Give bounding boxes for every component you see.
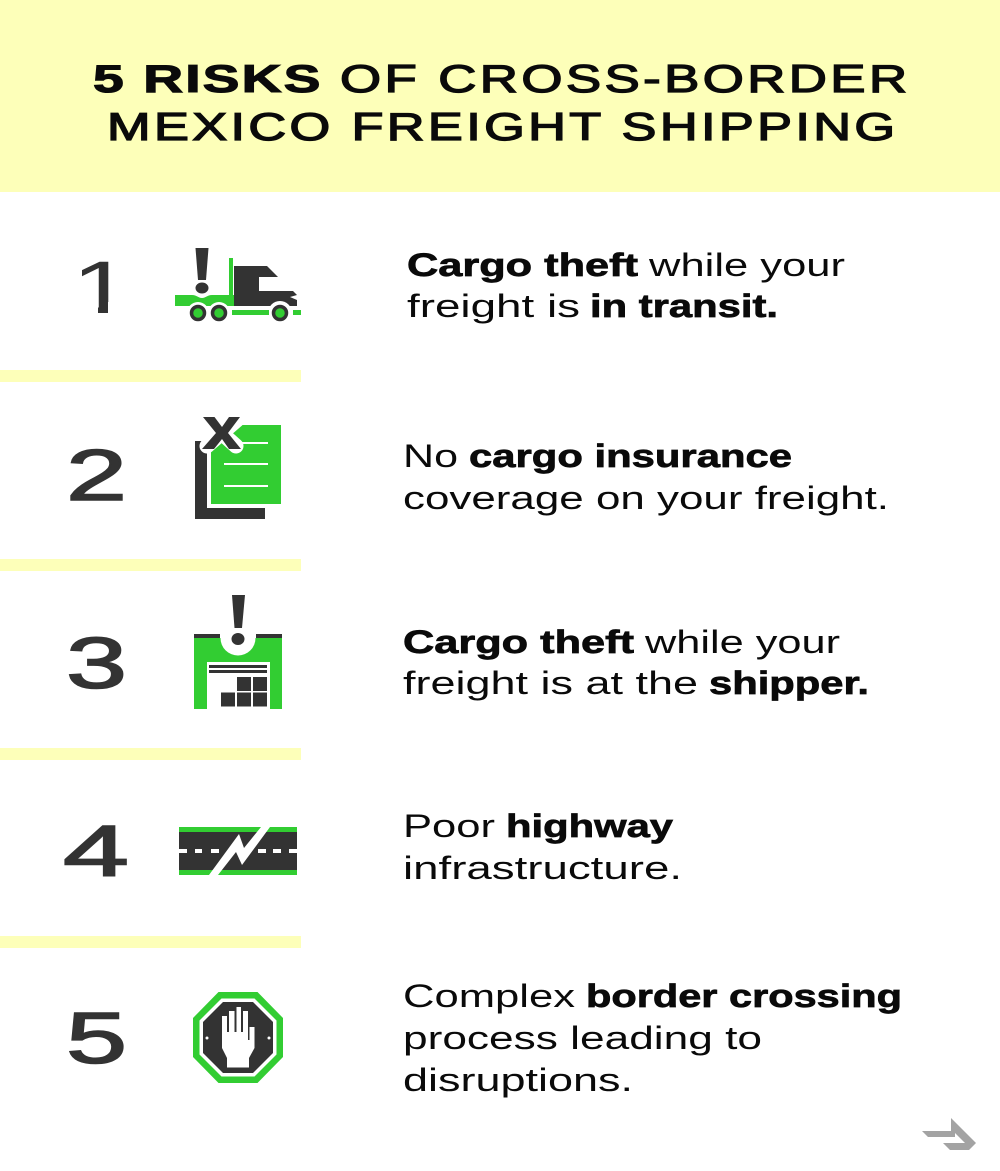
text: risk 3: while your (644, 624, 840, 660)
risk 3 (66, 595, 869, 709)
number 4: 4 (63, 812, 129, 892)
text: risk 4 (403, 808, 682, 886)
text: risk 1: Cargo theft (407, 247, 638, 283)
icon: warehouse with warning (194, 595, 282, 709)
number 3: 3 (66, 624, 127, 704)
text: risk 5: border crossing (586, 978, 902, 1014)
text: risk 3: Cargo theft (403, 624, 634, 660)
text: risk 2 (403, 438, 889, 516)
risk 5 (66, 978, 902, 1098)
text: risk 4: infrastructure. (403, 850, 682, 886)
text: risk 3: freight is at the (403, 665, 698, 701)
text: risk 3 (403, 624, 869, 701)
icon: document with X (195, 417, 281, 519)
text: risk 4: highway (506, 808, 673, 844)
text: risk 5 (403, 978, 902, 1098)
text: risk 4: Poor (403, 808, 495, 844)
text: risk 1 (407, 247, 845, 324)
risk 4 (63, 808, 682, 892)
text: risk 2: coverage on your freight. (403, 480, 889, 516)
icon: logo arrow (922, 1118, 976, 1150)
text: risk 2: No (403, 438, 458, 474)
text: risk 1: in transit. (590, 288, 778, 324)
icon: truck with warning (175, 248, 301, 325)
title: 5 RISKS (93, 58, 322, 101)
title: MEXICO FREIGHT SHIPPING (107, 106, 898, 149)
text: risk 5: Complex (403, 978, 575, 1014)
text: risk 5: process leading to (403, 1020, 762, 1056)
text: risk 1: while your (648, 247, 845, 283)
title: OF CROSS-BORDER (340, 58, 910, 101)
title (93, 58, 910, 149)
icon: damaged road (179, 827, 297, 875)
risk 2 (66, 417, 889, 519)
icon: stop sign with hand (193, 992, 283, 1083)
text: risk 2: cargo insurance (469, 438, 792, 474)
text: risk 5: disruptions. (403, 1062, 633, 1098)
number 2: 2 (66, 436, 127, 516)
number 5: 5 (66, 999, 127, 1079)
risk 1 (82, 248, 844, 324)
header panel (0, 0, 1000, 192)
number 1: 1 (72, 246, 132, 329)
text: risk 1: freight is (407, 288, 580, 324)
text: risk 3: shipper. (709, 665, 869, 701)
